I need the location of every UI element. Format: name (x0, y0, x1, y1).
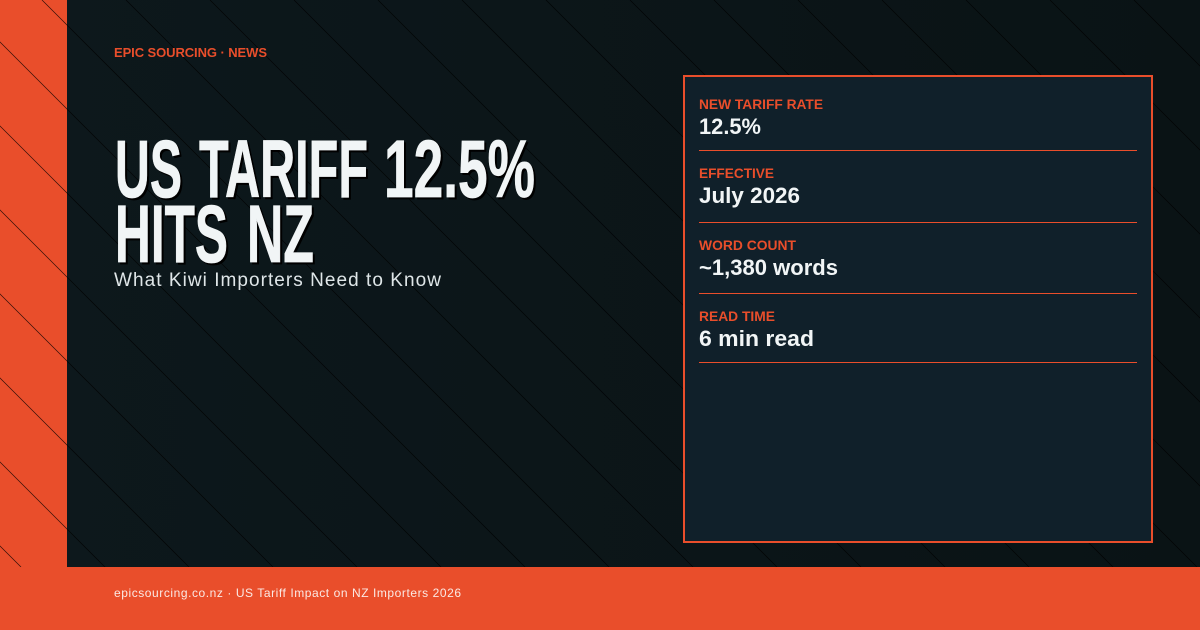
fact: word count: ~1,380 words (699, 255, 838, 280)
footer text: epicsourcing.co.nz · US Tariff Impact on NZ Importers 2026 (114, 586, 461, 600)
subtitle: What Kiwi Importers Need to Know (114, 270, 441, 291)
title: 12.5% (384, 124, 535, 215)
fact: new tariff rate (699, 97, 1137, 151)
left accent bar (0, 0, 67, 567)
fact: read time: 6 min read (699, 326, 814, 351)
panel: key facts (684, 76, 1152, 542)
fact: effective date (699, 166, 1137, 223)
title: NZ (247, 189, 314, 280)
fact: read time (699, 309, 1137, 363)
title: HITS (115, 189, 228, 280)
fact: effective date: EFFECTIVE (699, 166, 774, 181)
fact: effective date: July 2026 (699, 183, 800, 208)
fact: read time: READ TIME (699, 309, 775, 324)
title: US (115, 124, 182, 215)
fact: new tariff rate: NEW TARIFF RATE (699, 97, 823, 112)
footer bar (0, 567, 1200, 630)
title (115, 124, 535, 280)
fact: new tariff rate: 12.5% (699, 114, 761, 139)
fact: word count (699, 238, 1137, 294)
fact: word count: WORD COUNT (699, 238, 797, 253)
eyebrow: brand and section: EPIC SOURCING · NEWS (114, 45, 267, 60)
title: TARIFF (199, 124, 368, 215)
